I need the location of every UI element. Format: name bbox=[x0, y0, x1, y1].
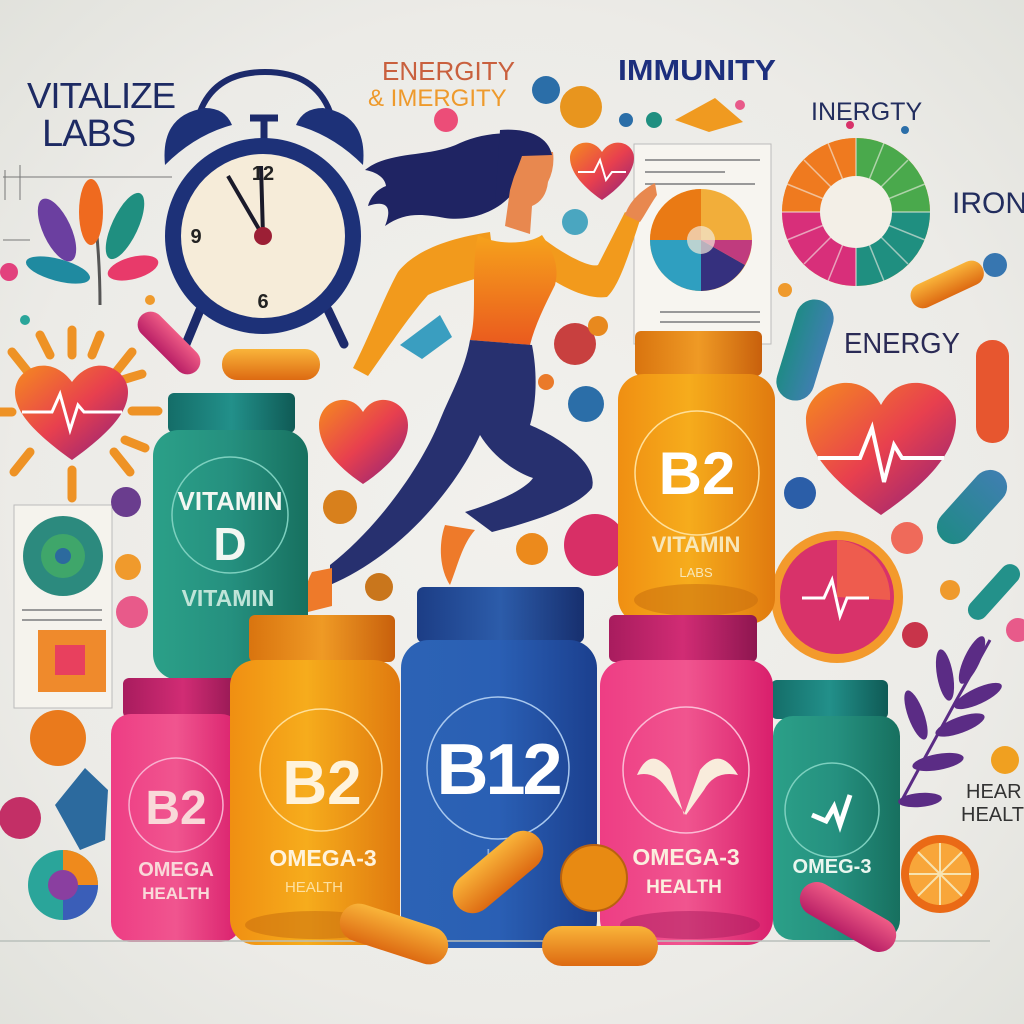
small decorative pills and dots, top bbox=[0, 76, 909, 325]
bottle: B2 omega-3: B2 bbox=[282, 749, 362, 818]
heading: energy: & IMERGITY bbox=[368, 85, 507, 112]
leaf sprig bbox=[897, 633, 1005, 809]
heart near hand bbox=[570, 143, 634, 200]
bottle: vitamin D: VITAMIN bbox=[182, 585, 274, 611]
bottle: pink left: B2 bbox=[145, 782, 207, 835]
pill: orange horizontal bbox=[222, 349, 320, 380]
alarm clock: 6 bbox=[257, 291, 269, 313]
bottle: pink omega-3 bbox=[600, 615, 773, 945]
plant: colourful leaves bbox=[23, 179, 161, 305]
alarm clock: 12 bbox=[252, 163, 274, 185]
colour wheel bbox=[782, 138, 930, 286]
bottle: pink omega-3: HEALTH bbox=[646, 877, 722, 898]
bottle: pink left: HEALTH bbox=[142, 884, 210, 903]
decorative pills centre bbox=[323, 315, 626, 601]
bottle: pink left bbox=[111, 678, 243, 942]
bottle: B2 top: LABS bbox=[679, 565, 713, 580]
brand title: VITALIZE bbox=[27, 75, 175, 116]
bottle: B12: HI bbox=[486, 846, 504, 866]
bottle: pink omega-3: OMEGA-3 bbox=[632, 844, 740, 870]
heading: immunity: IMMUNITY bbox=[618, 55, 776, 87]
bottle: teal right: OMEG-3 bbox=[793, 856, 871, 878]
alarm clock: 9 bbox=[190, 226, 202, 248]
pill: pink diagonal bbox=[132, 306, 206, 380]
bottle: B2 omega-3: HEALTH bbox=[285, 879, 343, 896]
bottle: B2 top: B2 bbox=[659, 440, 735, 507]
bottle: B12: B12 bbox=[436, 730, 560, 810]
bottle: vitamin D: D bbox=[213, 518, 247, 570]
bottle: B2 top: VITAMIN bbox=[652, 532, 740, 557]
brand title: LABS bbox=[42, 113, 135, 155]
ground line bbox=[0, 940, 990, 942]
bottle: pink left: OMEGA bbox=[138, 859, 214, 881]
document with pie chart bbox=[634, 144, 771, 344]
alarm clock bbox=[164, 72, 364, 344]
round pulse badge bbox=[771, 531, 903, 663]
bottle: vitamin D: VITAMIN bbox=[178, 486, 282, 516]
bottle: teal right bbox=[771, 680, 900, 940]
bottle: B2 top bbox=[618, 331, 775, 624]
bottle: B12 bbox=[401, 587, 597, 948]
heading: energy: ENERGITY bbox=[382, 56, 515, 86]
middle heart bbox=[319, 400, 408, 484]
heading: heart health: HEAR bbox=[966, 781, 1022, 803]
icon: sunburst heart bbox=[0, 330, 158, 498]
orange slice bbox=[901, 835, 979, 913]
brand title bbox=[27, 75, 175, 155]
big heart bbox=[806, 383, 956, 515]
capsules on right bbox=[772, 253, 1024, 624]
woman running bbox=[305, 130, 657, 612]
pills in foreground bbox=[335, 823, 902, 969]
bottle: B2 omega-3: OMEGA-3 bbox=[269, 845, 377, 871]
heading: heart health bbox=[961, 781, 1024, 826]
right decorative dots bbox=[891, 522, 1024, 774]
left panel: document with circles bbox=[14, 505, 112, 708]
left decorative items bbox=[0, 487, 148, 920]
heading: inergty: INERGTY bbox=[811, 98, 922, 126]
faint chart lines at left bbox=[3, 165, 172, 240]
bottle: vitamin D bbox=[153, 393, 308, 680]
heading: energy right: ENERGY bbox=[844, 328, 960, 360]
heading: energy bbox=[368, 56, 515, 112]
bottle: B2 omega-3 bbox=[230, 615, 400, 945]
